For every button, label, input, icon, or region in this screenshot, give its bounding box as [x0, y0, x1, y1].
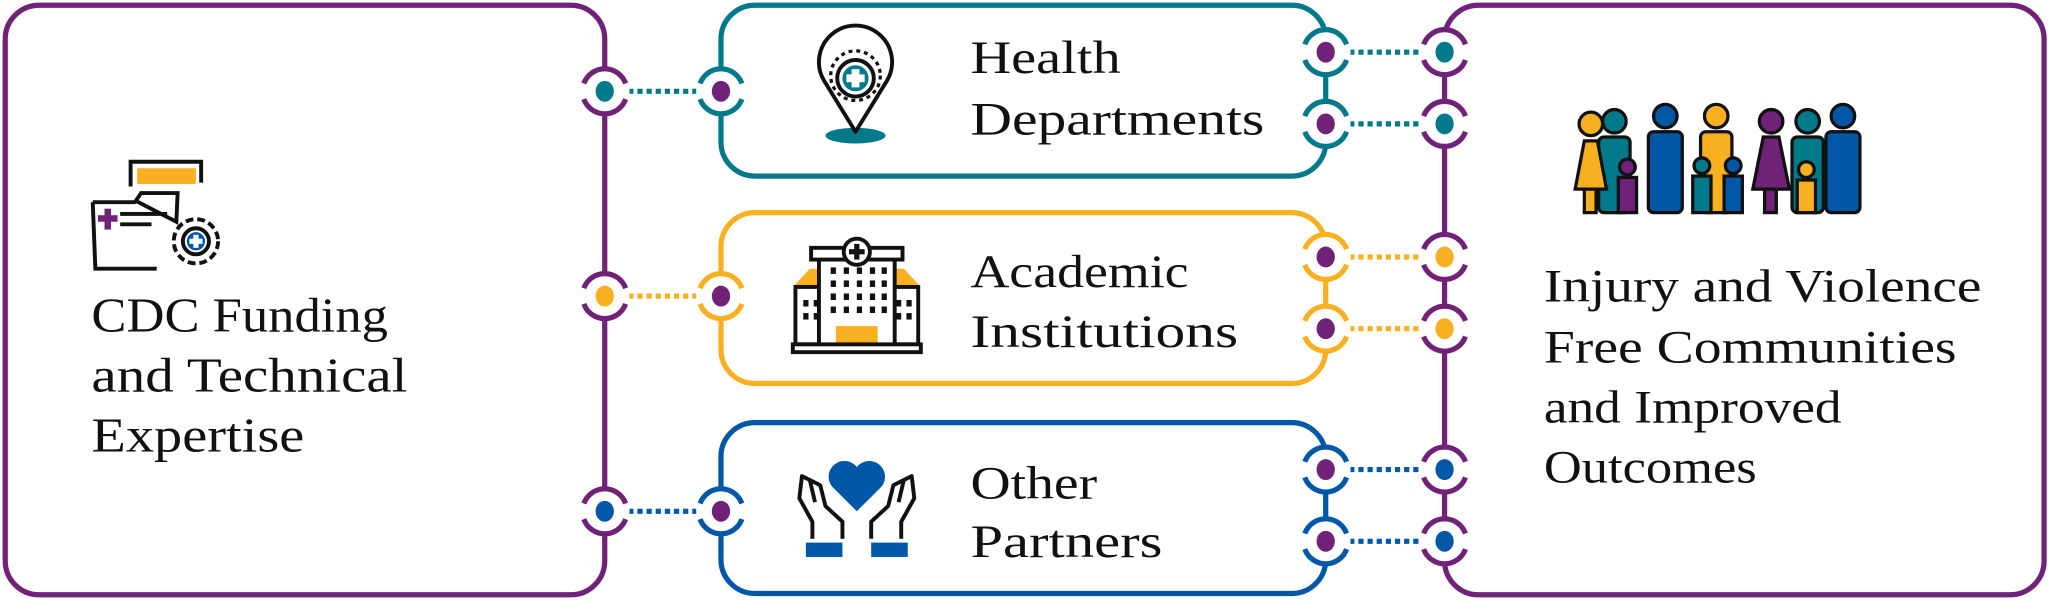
text: outcomes: Outcomes	[1544, 442, 1757, 494]
text: Academic Institutions: Academic	[970, 246, 1189, 298]
text: Other Partners	[970, 457, 1162, 568]
text: Other Partners: Partners	[970, 516, 1162, 568]
connectors: links between panels	[580, 27, 1469, 566]
panel: CDC funding	[5, 5, 605, 595]
text: Academic Institutions: Institutions	[970, 306, 1238, 358]
text: Health Departments	[970, 32, 1264, 145]
panel: Other Partners	[721, 423, 1326, 593]
icon: hospital	[793, 239, 921, 352]
text: Other Partners: Other	[970, 457, 1098, 509]
text: outcomes: Free Communities	[1544, 322, 1957, 374]
panel: outcomes	[1445, 5, 2044, 595]
text: outcomes: and Improved	[1544, 382, 1842, 434]
text: CDC Funding: Expertise	[91, 409, 304, 462]
icon: hands with heart	[799, 461, 914, 557]
text: outcomes: Injury and Violence	[1544, 260, 1981, 312]
text: CDC Funding: CDC Funding	[91, 289, 388, 342]
text: CDC Funding	[91, 289, 408, 462]
icon: community people	[1575, 104, 1860, 213]
text: outcomes	[1544, 260, 1981, 494]
text: Health Departments: Health	[970, 32, 1121, 84]
icon: folder with gear	[93, 162, 218, 269]
icon: map pin	[819, 26, 892, 143]
panel: Health Departments	[721, 5, 1326, 176]
panel: Academic Institutions	[721, 213, 1326, 383]
text: CDC Funding: and Technical	[91, 349, 408, 402]
text: Health Departments: Departments	[970, 93, 1264, 145]
text: Academic Institutions	[970, 246, 1238, 358]
